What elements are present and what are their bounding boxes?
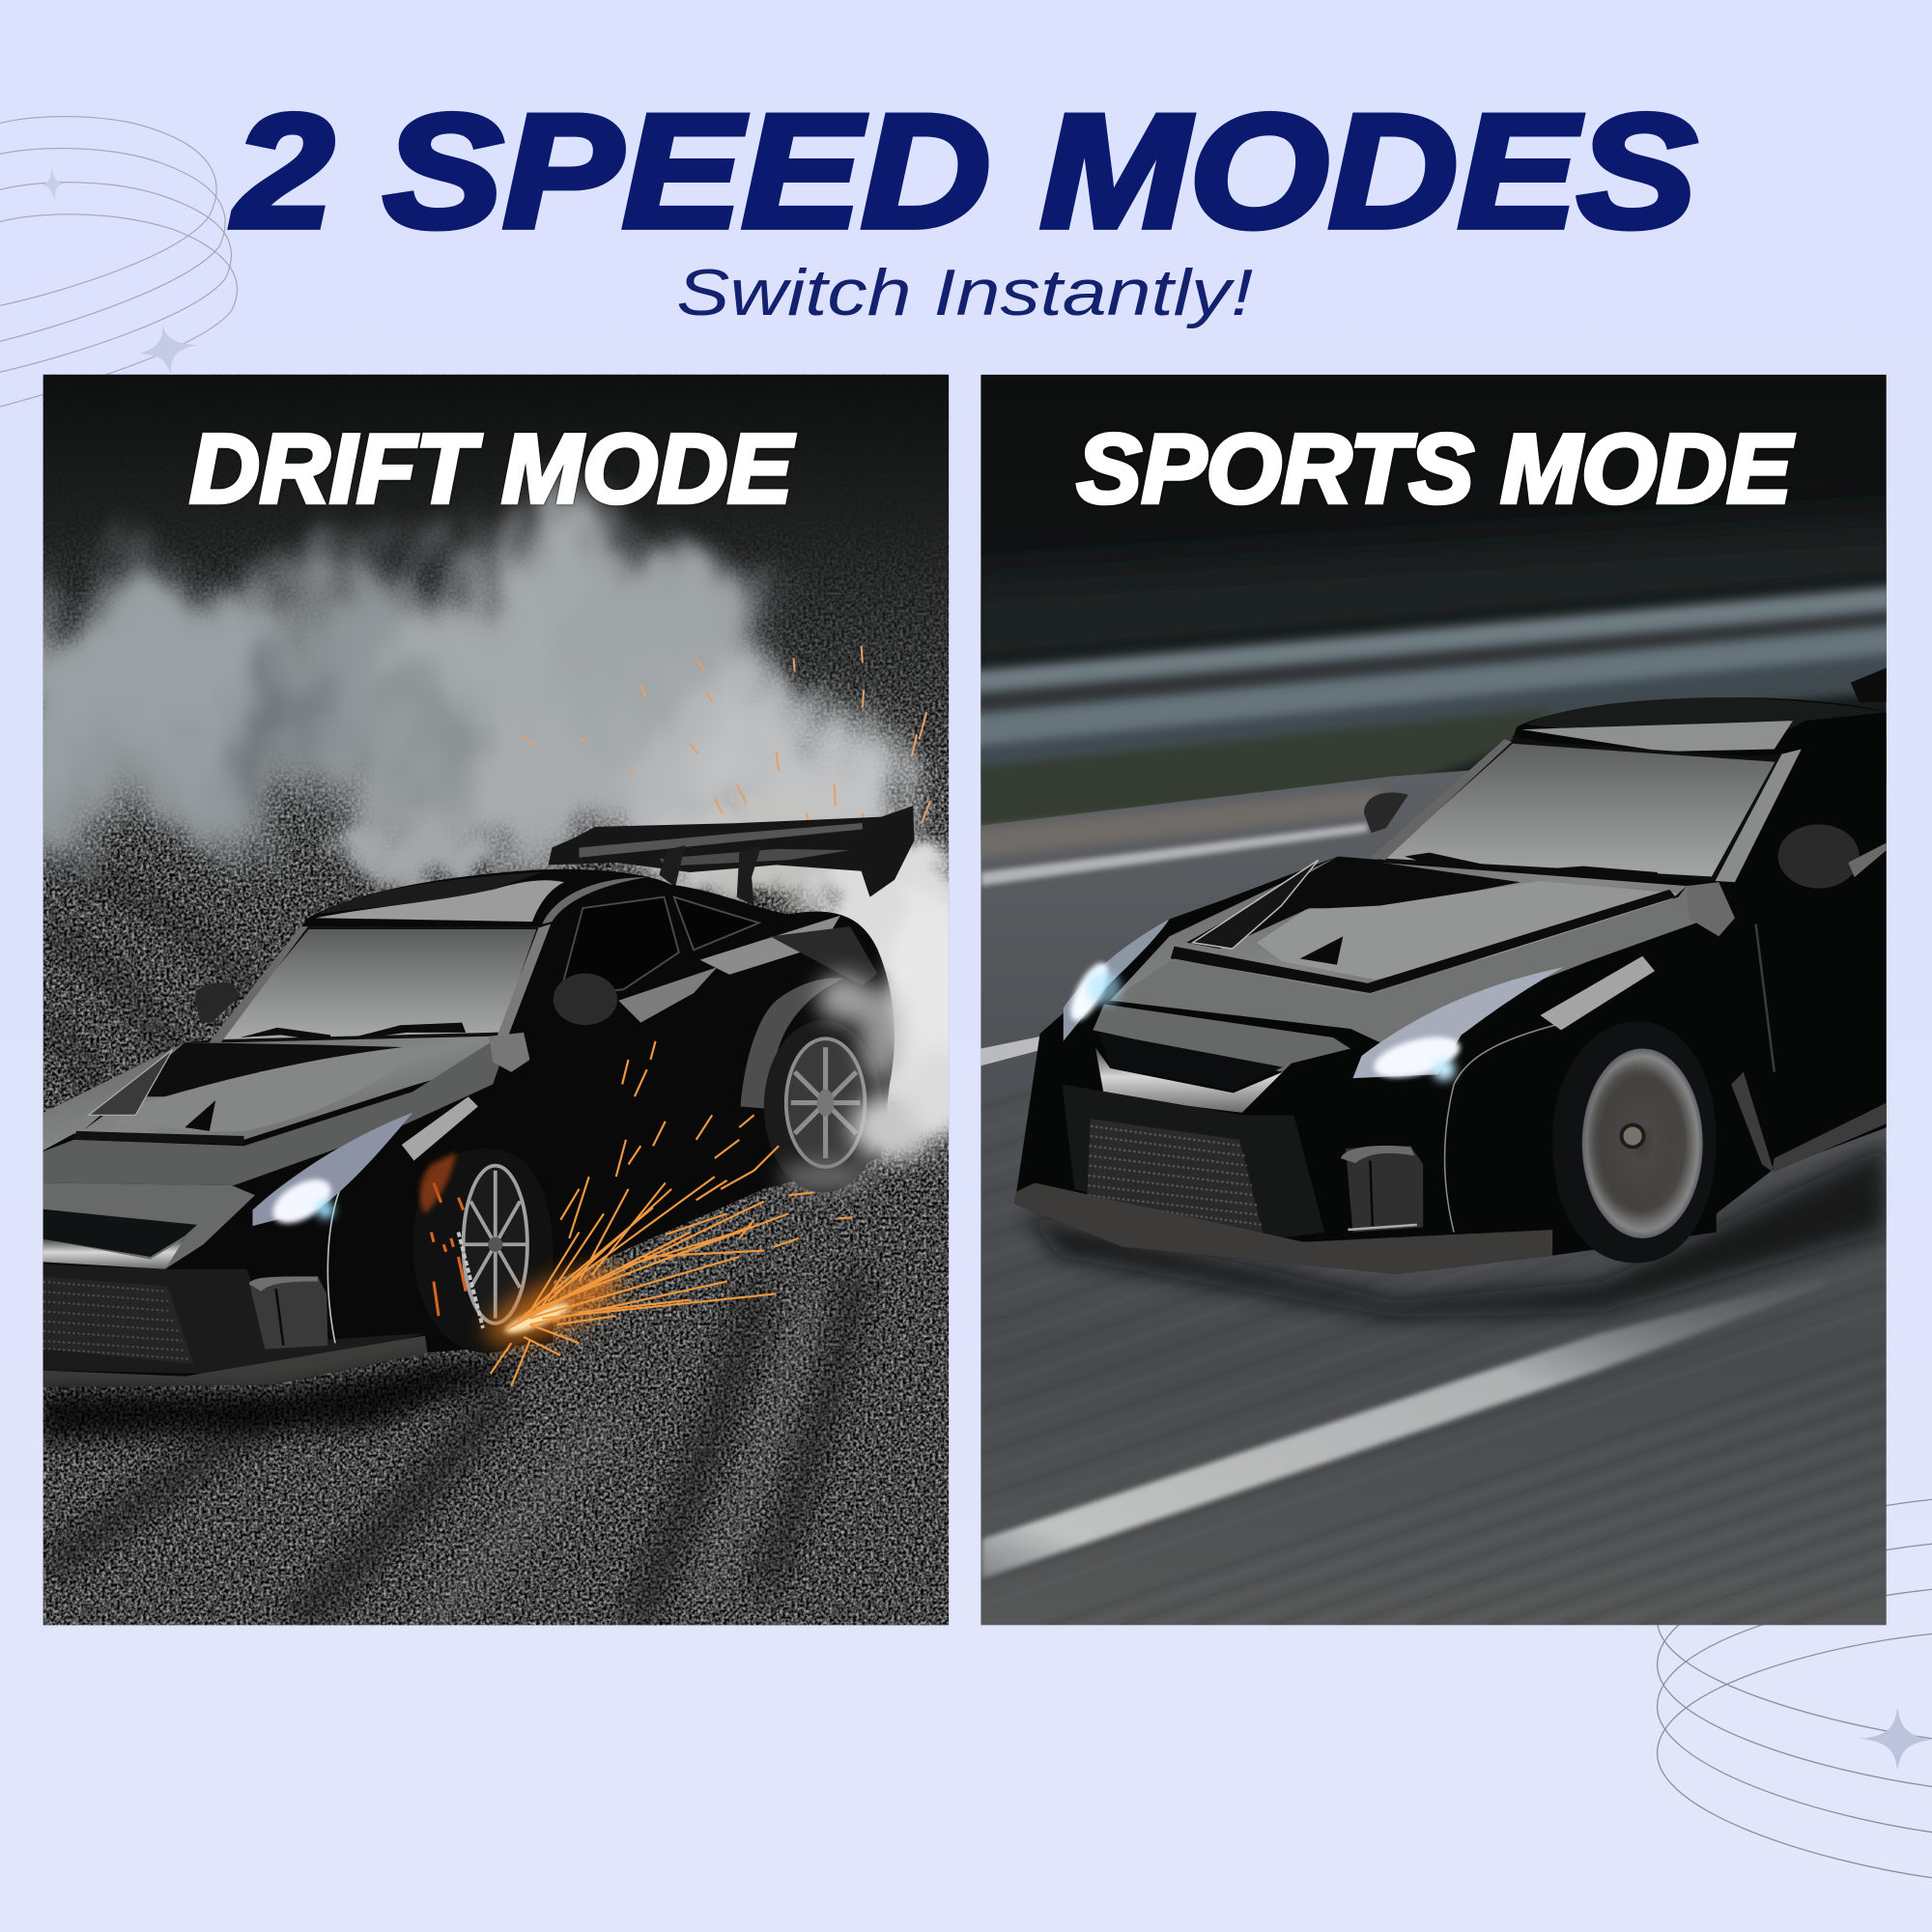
smoke cloud — [0, 536, 979, 1140]
mesh grille — [1087, 1119, 1263, 1234]
label: sports mode: SPORTS MODE — [1077, 415, 1794, 524]
car silhouette — [39, 869, 895, 1385]
wipers — [1405, 853, 1661, 882]
sparks — [420, 1041, 853, 1386]
gravel shoulder — [961, 788, 1380, 860]
headlight — [252, 1113, 412, 1233]
icon: sparkle small — [42, 165, 64, 202]
asphalt ground — [43, 375, 949, 1625]
left mirror — [1364, 792, 1408, 833]
front wheel — [1552, 1021, 1717, 1263]
panel: sports mode — [961, 375, 1910, 1625]
sparks in smoke — [522, 645, 931, 823]
splitter — [1014, 1182, 1552, 1274]
fender vents — [1540, 956, 1655, 1030]
grille slot — [1099, 1033, 1283, 1091]
headlight right — [1353, 967, 1564, 1086]
door shine — [1756, 924, 1775, 1072]
chrome bar — [1095, 1047, 1283, 1113]
road streaks light — [980, 832, 1887, 1625]
background blur — [980, 375, 1887, 781]
car shadow — [1023, 1146, 1887, 1319]
car roof — [1512, 697, 1887, 763]
front wheel — [412, 1149, 554, 1353]
left a-pillar — [207, 926, 308, 1045]
rear wheel — [764, 1020, 882, 1193]
car windshield — [214, 927, 538, 1041]
dark sky gradient — [43, 375, 949, 781]
wing — [549, 806, 914, 906]
car windshield — [1380, 742, 1778, 878]
upper bumper panel — [1093, 1005, 1350, 1072]
headlight left — [1064, 920, 1169, 1041]
side mirror left — [195, 982, 241, 1023]
icon: sparkle bottom right — [1861, 1707, 1932, 1771]
decoration: orbit lines top left — [0, 117, 237, 407]
fender line — [1445, 1023, 1565, 1233]
decoration: orbit lines bottom right — [1658, 1499, 1932, 1878]
white line near — [982, 1276, 1825, 1578]
road streaks dark — [980, 810, 1887, 1625]
ground shadow — [39, 1361, 542, 1441]
road surface — [980, 739, 1887, 1625]
rear fender flare — [741, 978, 844, 1109]
bumper — [39, 1264, 425, 1375]
spoiler tip — [1851, 668, 1887, 702]
side intake — [249, 1276, 327, 1350]
car roof — [316, 872, 647, 924]
car a-pillar — [497, 924, 551, 1037]
light tyre residue — [431, 1293, 813, 1625]
front panel — [39, 1182, 255, 1269]
fender vents — [402, 1096, 478, 1161]
a-pillar — [1716, 750, 1802, 882]
side mirror right — [554, 974, 617, 1025]
tyre tracks — [49, 863, 858, 1625]
panel: drift mode — [0, 375, 979, 1625]
car hood — [1110, 856, 1735, 1042]
left a-pillar — [1370, 739, 1512, 860]
title: 2 SPEED MODES — [231, 82, 1696, 262]
chrome bar — [39, 1238, 185, 1269]
car silhouette — [1014, 697, 1887, 1274]
side intake — [1341, 1146, 1423, 1233]
rear tyre smoke — [779, 899, 969, 1191]
icon: sparkle large — [139, 323, 197, 375]
grille slot — [39, 1208, 197, 1257]
white line mid — [980, 1037, 1041, 1065]
dark tree line — [961, 518, 1910, 678]
mesh grille — [39, 1276, 193, 1364]
right mirror — [1778, 824, 1887, 889]
splitter — [39, 1336, 428, 1387]
lower bumper — [1062, 1084, 1324, 1239]
subtitle: Switch Instantly! — [676, 257, 1253, 329]
car hood — [39, 1033, 529, 1185]
door trim — [1731, 1072, 1887, 1173]
label: drift mode: DRIFT MODE — [189, 415, 795, 524]
grass verge — [961, 708, 1552, 842]
guard rail — [961, 584, 1910, 779]
side windows — [559, 897, 759, 997]
door reflections — [618, 916, 877, 1023]
fender bolts — [327, 1182, 343, 1343]
white line far — [980, 823, 1368, 886]
wiper blades — [241, 1022, 466, 1037]
